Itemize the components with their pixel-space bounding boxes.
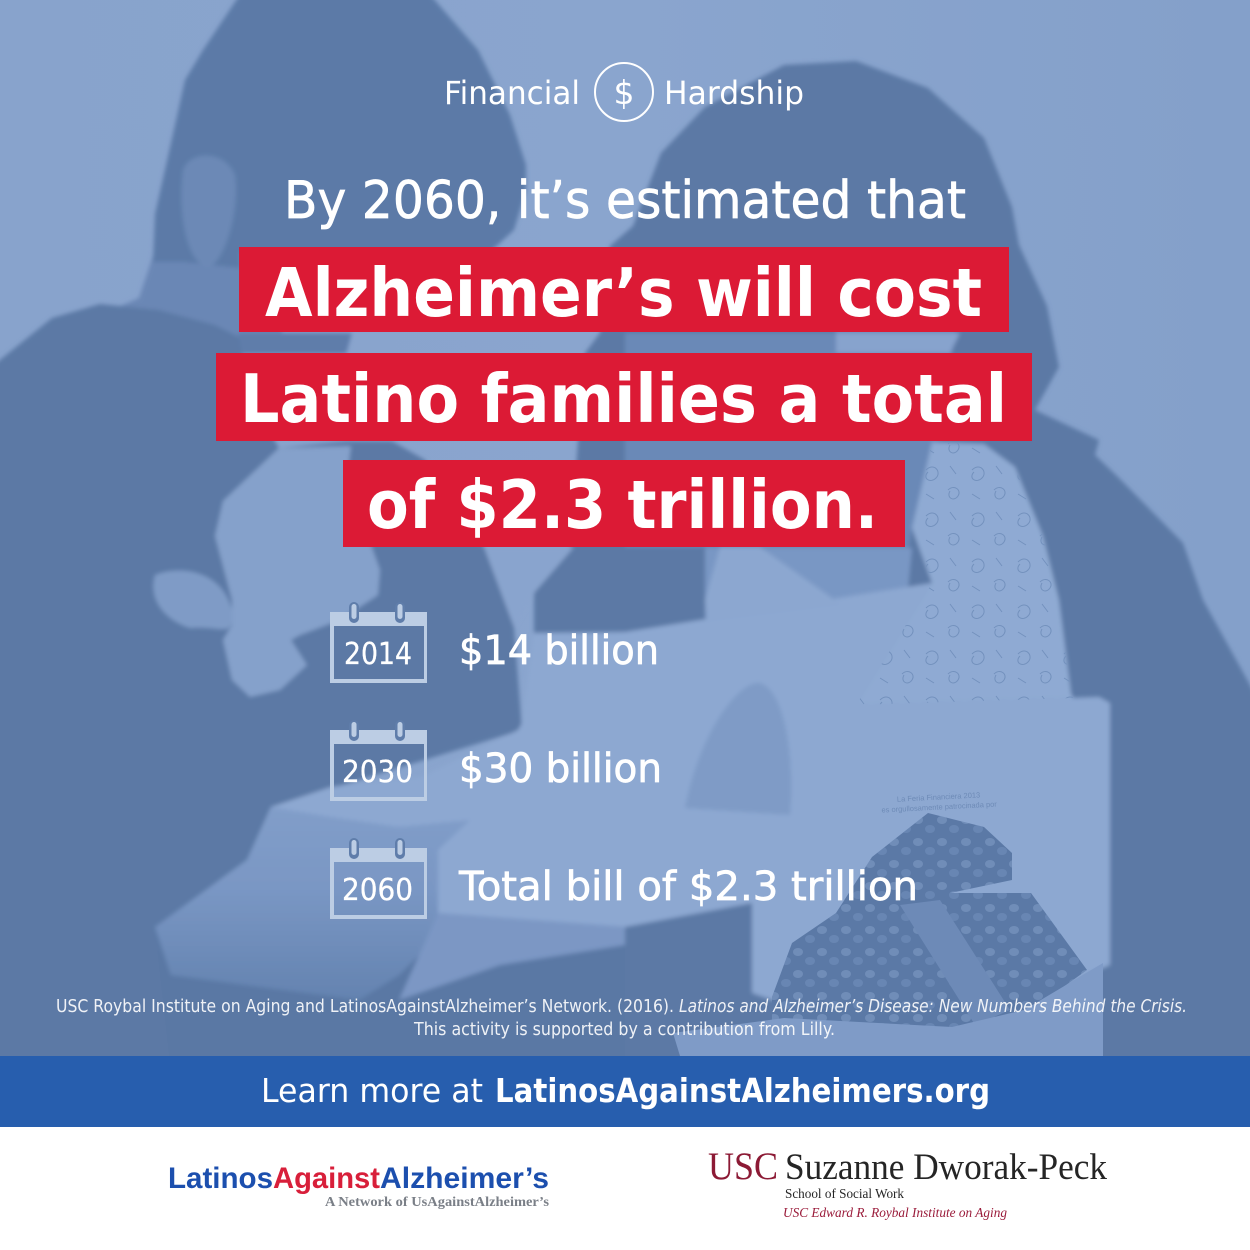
call to action bar: Learn more at [261, 1071, 483, 1110]
logo: USC Suzanne Dworak-Peck: School of Social Work [785, 1187, 904, 1202]
blouse: floral print [856, 442, 1073, 705]
man: hair [153, 0, 526, 268]
logo: LatinosAgainstAlzheimer's: Alzheimer’s [380, 1162, 549, 1195]
citation and sponsor note: USC Roybal Institute on Aging and LatinosAgainstAlzheimer’s Network. (2016). [56, 997, 674, 1017]
blouse: collar left [705, 547, 842, 622]
brochure fine print: La Feria Financiera 2013 [897, 790, 980, 804]
child: ear [153, 571, 232, 629]
logo: LatinosAgainstAlzheimer's: Against [273, 1162, 380, 1195]
timeline: cost by year [330, 602, 918, 919]
citation and sponsor note: Latinos and Alzheimer’s Disease: New Numbers Behind the Crisis. [679, 997, 1187, 1017]
man: neck [100, 245, 282, 345]
call to action bar: LatinosAgainstAlzheimers.org [495, 1071, 990, 1110]
logo: USC Suzanne Dworak-Peck: USC Edward R. Roybal Institute on Aging [783, 1206, 1007, 1221]
icon: calendar 2030 [330, 720, 427, 801]
logo: LatinosAgainstAlzheimer's [168, 1162, 549, 1209]
sheet at lower right [673, 963, 1103, 1056]
hand and arm [155, 777, 625, 1000]
logo: USC Suzanne Dworak-Peck: USC [708, 1145, 778, 1188]
logo: USC Suzanne Dworak-Peck [708, 1145, 1107, 1221]
white footer band [0, 1127, 1250, 1250]
collar wedge [484, 547, 574, 627]
brochure fine print: es orgullosamente patrocinada por [881, 799, 998, 815]
icon: calendar 2060 [330, 838, 427, 919]
icon: calendar 2030: 2030 [342, 755, 413, 790]
brochure pages [271, 583, 1110, 1010]
lead-in text: By 2060, it’s estimated that [284, 171, 966, 231]
child: hair and torso [0, 304, 522, 1070]
logo: USC Suzanne Dworak-Peck: Suzanne Dworak-Peck [785, 1147, 1107, 1188]
call to action bar [0, 1056, 1250, 1127]
icon: calendar 2060: 2060 [342, 873, 413, 908]
brochure fine print [881, 790, 998, 815]
value 2030: $30 billion [459, 746, 662, 792]
backpack strap [900, 900, 1010, 1025]
woman: face in shadow [625, 250, 956, 600]
dark lower background [0, 880, 1250, 1070]
banner line 1: Alzheimer’s will cost [265, 254, 982, 332]
value 2014: $14 billion [459, 628, 659, 674]
woman: neck [705, 548, 912, 620]
logo: LatinosAgainstAlzheimer's: A Network of UsAgainstAlzheimer’s [325, 1194, 549, 1209]
man: ear [181, 156, 236, 268]
man: chin shadow [239, 333, 352, 354]
headline: red banners [216, 247, 1032, 547]
child: face and neck [215, 446, 380, 697]
logo: LatinosAgainstAlzheimer's: Latinos [168, 1162, 273, 1195]
row 2014 [330, 602, 659, 683]
word: Hardship: Hardship [664, 74, 804, 112]
icon: calendar 2014 [330, 602, 427, 683]
woman: hair and cardigan [534, 61, 1250, 1070]
banner line 3: of $2.3 trillion. [367, 466, 878, 544]
woman: nose highlight [836, 333, 960, 353]
backpack print [772, 813, 1087, 1030]
patterned backpack [772, 813, 1087, 1030]
blouse: collar right [856, 442, 1073, 705]
banner line 2: Latino families a total [240, 360, 1007, 438]
row 2030 [330, 720, 662, 801]
sliver under brochure [399, 913, 625, 1000]
citation and sponsor note: This activity is supported by a contribution from Lilly. [413, 1020, 835, 1040]
word: Financial: Financial [444, 74, 580, 112]
brochure fold shadow [685, 683, 791, 815]
value 2060: Total bill of $2.3 trillion [458, 864, 918, 910]
icon: dollar in circle [595, 63, 653, 121]
row 2060 [330, 838, 918, 919]
woman: dark cardigan left [534, 547, 705, 640]
header: Financial Hardship with dollar icon [444, 63, 804, 121]
icon: calendar 2014: 2014 [344, 637, 412, 672]
citation and sponsor note [56, 997, 1187, 1040]
icon: dollar in circle: $ [614, 73, 634, 112]
